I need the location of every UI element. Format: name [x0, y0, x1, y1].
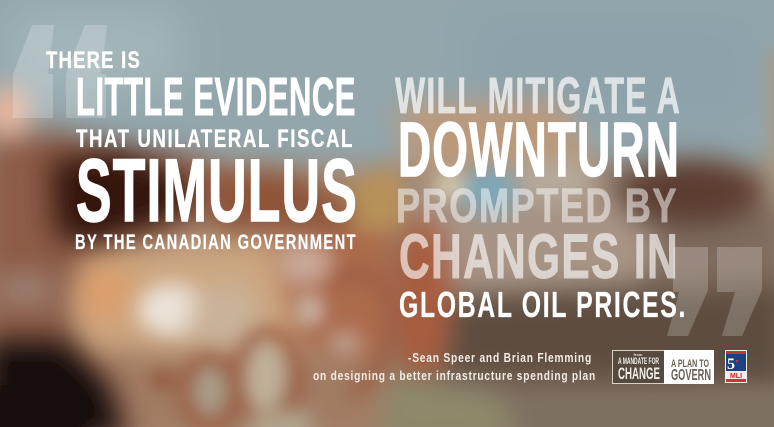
quote: left column — [46, 47, 358, 254]
quote: right column — [395, 67, 687, 325]
background: right side — [400, 170, 774, 427]
logo: MLI 5 years: 5 — [727, 356, 735, 373]
logo: A Mandate for Change / A Plan to Govern: A PLAN TO — [671, 358, 709, 370]
logo: A Mandate for Change / A Plan to Govern: from — [634, 352, 643, 357]
background: digit shapes — [100, 350, 400, 427]
closing quotation mark — [667, 247, 762, 336]
logo: A Mandate for Change / A Plan to Govern: A MANDATE FOR — [618, 356, 659, 366]
logo: A Mandate for Change / A Plan to Govern: CHANGE — [618, 364, 660, 383]
background: mustard strip — [345, 165, 405, 232]
quote: left column: BY THE CANADIAN GOVERNMENT — [75, 231, 357, 254]
attribution: on designing a better infrastructure spending plan — [313, 368, 596, 383]
logo: MLI 5 years — [725, 350, 747, 383]
quote: left column: THAT UNILATERAL FISCAL — [76, 125, 354, 153]
attribution: -Sean Speer and Brian Flemming — [408, 350, 592, 365]
logo: A Mandate for Change / A Plan to Govern: GOVERN — [671, 367, 711, 384]
background: dark finger — [0, 130, 225, 427]
quote: left column: THERE IS — [46, 47, 141, 74]
quote: left column: STIMULUS — [76, 140, 358, 240]
quote: left column: LITTLE EVIDENCE — [76, 67, 356, 127]
background: reddish note, centre — [275, 200, 400, 400]
logo: MLI 5 years: MLI — [730, 373, 742, 380]
background: tan note, lower left — [60, 235, 310, 420]
quote: right column: PROMPTED BY — [396, 180, 678, 233]
attribution — [313, 350, 596, 383]
logo: A Mandate for Change / A Plan to Govern — [612, 350, 714, 384]
opening quotation mark — [13, 25, 107, 118]
